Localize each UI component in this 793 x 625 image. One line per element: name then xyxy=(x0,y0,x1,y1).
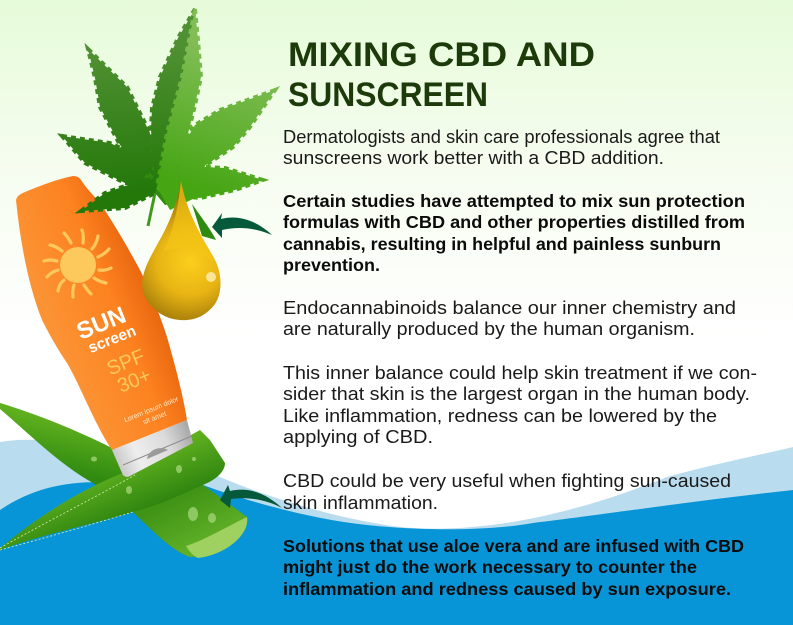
arrow: to cannabis leaf xyxy=(212,213,272,238)
tube label: sit amet xyxy=(142,411,168,426)
waves xyxy=(0,440,793,625)
arrow: to aloe vera xyxy=(220,485,282,508)
text block: intro: sunscreens work better with a CBD addition. xyxy=(283,148,664,168)
text block: studies xyxy=(283,191,745,275)
icon: sunscreen tube xyxy=(16,176,193,477)
text block: studies: cannabis, resulting in helpful and painless sunburn xyxy=(283,234,721,254)
text block: solutions xyxy=(283,536,744,599)
text block: studies: prevention. xyxy=(283,255,380,275)
tube label: screen xyxy=(86,322,139,357)
text block: sun-caused inflammation xyxy=(283,471,731,513)
text block: endocannabinoids: Endocannabinoids balance our inner chemistry and xyxy=(283,298,736,318)
tube label: Lorem ipsum dolor xyxy=(123,396,180,424)
tube label xyxy=(73,295,184,436)
text block: sun-caused inflammation: CBD could be very useful when fighting sun-caused xyxy=(283,471,731,491)
text block: studies: Certain studies have attempted to mix sun protection xyxy=(283,191,745,211)
text block: inner balance: sider that skin is the largest organ in the human body. xyxy=(283,384,750,404)
text block: solutions: might just do the work necessary to counter the xyxy=(283,557,697,577)
tube label: SPF xyxy=(104,345,148,380)
text block: endocannabinoids: are naturally produced by the human organism. xyxy=(283,319,695,339)
title xyxy=(288,36,595,114)
tube label: 30+ xyxy=(114,364,154,398)
text block: inner balance xyxy=(283,363,757,447)
text block: solutions: inflammation and redness caused by sun exposure. xyxy=(283,579,731,599)
icon: aloe vera leaves xyxy=(0,403,247,558)
tube label: SUN xyxy=(73,302,130,346)
icon: oil drop xyxy=(142,181,221,320)
text block: intro: Dermatologists and skin care professionals agree that xyxy=(283,127,720,147)
text block: inner balance: This inner balance could help skin treatment if we con- xyxy=(283,363,757,383)
title: MIXING CBD AND xyxy=(288,36,595,74)
icon: cannabis leaf xyxy=(62,9,275,240)
text block: endocannabinoids xyxy=(283,298,736,339)
text block: sun-caused inflammation: skin inflammation. xyxy=(283,493,438,513)
title: SUNSCREEN xyxy=(288,76,488,114)
text block: inner balance: Like inflammation, redness can be lowered by the xyxy=(283,406,717,426)
text block: solutions: Solutions that use aloe vera and are infused with CBD xyxy=(283,536,744,556)
text block: inner balance: applying of CBD. xyxy=(283,427,433,447)
text block: intro xyxy=(283,127,720,168)
icon: sun on tube xyxy=(44,230,111,297)
text block: studies: formulas with CBD and other properties distilled from xyxy=(283,212,745,232)
tube cap xyxy=(112,420,193,477)
